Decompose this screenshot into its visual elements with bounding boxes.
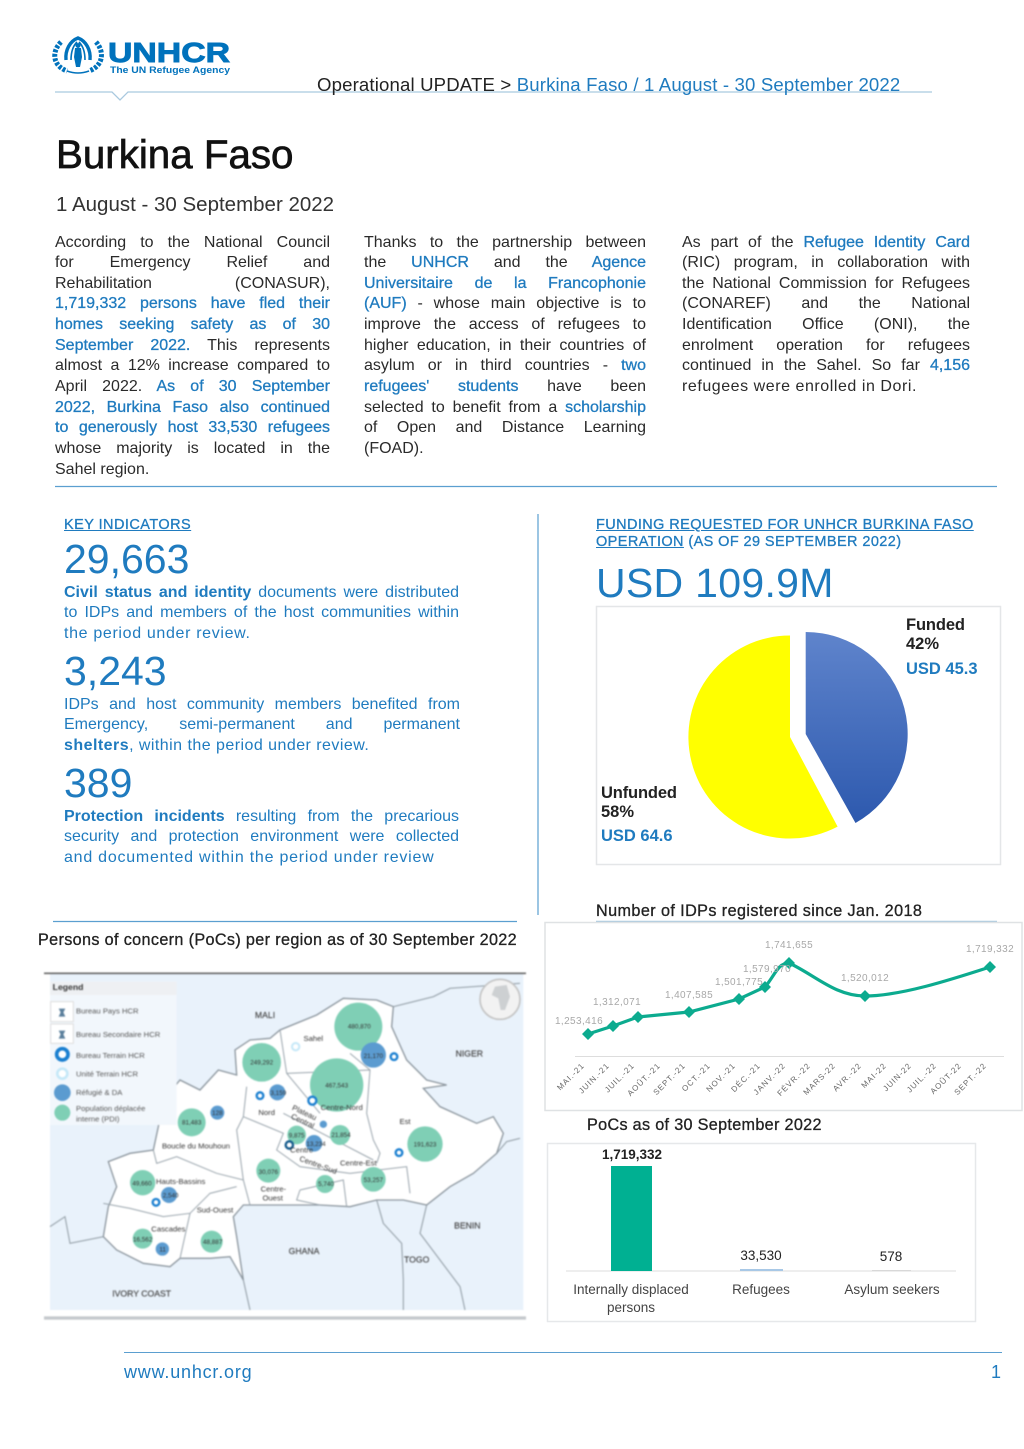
circle values: 30,076	[259, 1169, 278, 1176]
text column 2	[364, 234, 646, 457]
funding heading: OPERATION (AS OF 29 SEPTEMBER 2022)	[596, 534, 901, 550]
indicator text: shelters: shelters, within the period under review.	[64, 737, 369, 754]
key indicators panel	[64, 516, 460, 866]
bar category labels: persons	[607, 1300, 655, 1315]
indicator text: civil status: the period under review.	[64, 625, 251, 642]
label: unfunded: Unfunded	[601, 784, 677, 802]
text column 1: 1,719,332 persons have fled their	[55, 295, 330, 312]
icon: laurel wreath and sheltering hands	[55, 38, 101, 73]
month axis labels: AOÛT-22	[929, 1061, 963, 1096]
header rule with chevron	[55, 91, 932, 101]
month axis labels: JUIN-22	[881, 1061, 913, 1093]
text column 1: whose majority is located in the	[55, 440, 330, 457]
indicator text: protection incidents	[64, 808, 459, 866]
text column 1: for Emergency Relief and	[55, 254, 330, 271]
text column 1: September 2022. This represents	[55, 337, 330, 354]
circle values: 128	[212, 1110, 223, 1117]
legend: Bureau Pays HCR	[76, 1007, 139, 1016]
text column 1: to generously host 33,530 refugees	[55, 419, 330, 436]
country names: BENIN	[454, 1220, 481, 1230]
indicator text: civil status	[64, 584, 459, 642]
region names: Centre	[290, 1146, 313, 1155]
text column 2: (AUF) - whose main objective is to	[364, 295, 646, 312]
data labels: 1,520,012	[841, 973, 889, 984]
legend: Population déplacée	[76, 1104, 145, 1113]
bar category labels: Internally displaced	[573, 1282, 689, 1297]
indicator text: protection incidents: Protection incidents resulting from the precarious	[64, 808, 459, 824]
label: unfunded: USD 64.6	[601, 827, 673, 845]
legend: Réfugié & DA	[76, 1088, 123, 1097]
bar chart heading: PoCs as of 30 September 2022	[587, 1116, 822, 1134]
refugee circles	[156, 1042, 386, 1256]
text column 3: continued in the Sahel. So far 4,156	[682, 357, 970, 374]
bar category labels	[573, 1282, 940, 1315]
circle values: 2,540	[163, 1192, 179, 1199]
region names: Centre-Sud	[298, 1154, 338, 1176]
text column 3: refugees were enrolled in Dori.	[682, 378, 917, 395]
legend: Bureau Secondaire HCR	[76, 1030, 161, 1039]
pie slice: funded	[806, 632, 908, 823]
data line	[588, 963, 990, 1034]
text column 3: enrolment operation for refugees	[682, 337, 970, 354]
indicator text: shelters: Emergency, semi-permanent and permanent	[64, 716, 460, 733]
bar: refugees	[740, 1269, 783, 1271]
title: Burkina Faso	[56, 132, 293, 177]
circle values	[132, 1024, 437, 1254]
region names: Centre-	[261, 1185, 287, 1194]
text column 2: (FOAD).	[364, 440, 424, 457]
text column 2: asylum or in third countries - two	[364, 357, 646, 374]
circle values: 16,562	[133, 1236, 153, 1243]
bar values: 578	[880, 1249, 902, 1264]
circle values: 13,234	[306, 1141, 326, 1148]
IDP circles	[130, 1003, 443, 1253]
map: persons of concern by region	[43, 972, 527, 1320]
region names	[151, 1034, 411, 1234]
funding heading	[596, 517, 974, 550]
label: funded: 42%	[906, 635, 939, 653]
text column 3	[682, 234, 970, 395]
field office markers	[153, 1053, 402, 1206]
label: funded: Funded	[906, 616, 965, 634]
data labels: 1,579,970	[743, 964, 791, 975]
data labels: 1,501,775	[715, 977, 763, 988]
region names: Sahel	[304, 1034, 323, 1043]
text column 3: Identification Office (ONI), the	[682, 316, 970, 333]
text column 3: the National Commission for Refugees	[682, 275, 970, 292]
wordmark: UNHCR	[108, 37, 230, 68]
bar category labels: Refugees	[732, 1282, 790, 1297]
month axis labels: AOÛT.-21	[626, 1061, 662, 1098]
label: funded	[906, 616, 978, 678]
bar category labels: Asylum seekers	[844, 1282, 940, 1297]
text column 1	[55, 234, 330, 478]
indicator text: protection incidents: and documented within the period under review	[64, 849, 434, 866]
month axis labels: MAI-22	[860, 1061, 888, 1090]
funding pie chart panel	[596, 606, 1002, 866]
data labels: 1,312,071	[593, 997, 641, 1008]
text column 1: Sahel region.	[55, 461, 149, 478]
globe	[480, 979, 520, 1019]
indicator: 389: 389	[64, 760, 132, 806]
text column 3: (CONAREF) and the National	[682, 295, 970, 312]
text column 3: As part of the Refugee Identity Card	[682, 234, 970, 250]
region names: Ouest	[262, 1194, 284, 1203]
month axis labels: SEPT.-21	[651, 1061, 687, 1097]
circle values: 11	[159, 1247, 166, 1254]
circle values: 81,483	[182, 1120, 202, 1127]
month axis labels: MAI.-21	[555, 1061, 586, 1092]
label: funded: USD 45.3	[906, 660, 978, 678]
region names: Plateau	[291, 1103, 318, 1122]
indicator: 3,243: 3,243	[64, 648, 167, 694]
legend: Bureau Terrain HCR	[76, 1051, 145, 1060]
text column 2: the UNHCR and the Agence	[364, 254, 646, 271]
region borders	[103, 1030, 410, 1258]
text column 3: (RIC) program, in collaboration with	[682, 254, 970, 271]
bar: asylum seekers	[872, 1270, 911, 1271]
legend: Unité Terrain HCR	[76, 1070, 138, 1079]
data labels	[555, 940, 1014, 1027]
region names: Cascades	[151, 1225, 186, 1234]
text column 1: April 2022. As of 30 September	[55, 378, 330, 395]
indicator text: shelters: IDPs and host community members benefited from	[64, 696, 460, 712]
text column 1: homes seeking safety as of 30	[55, 316, 330, 333]
indicator text: protection incidents: security and protection environment were collected	[64, 828, 459, 845]
circle values: 49,660	[132, 1181, 152, 1188]
month axis labels: JUIL.-21	[603, 1061, 636, 1094]
bar values: 33,530	[740, 1248, 782, 1263]
footer url: www.unhcr.org	[124, 1362, 252, 1382]
country names: IVORY COAST	[112, 1289, 172, 1299]
Burkina Faso outline	[103, 998, 503, 1280]
data labels: 1,741,655	[765, 940, 813, 951]
circle values: 249,292	[250, 1059, 274, 1066]
data labels: 1,253,416	[555, 1016, 603, 1027]
country names: TOGO	[404, 1255, 430, 1265]
bar: internally displaced persons	[611, 1166, 652, 1271]
month axis labels: OCT.-21	[680, 1061, 712, 1093]
label: unfunded	[601, 784, 677, 845]
circle values: 9,875	[289, 1133, 305, 1140]
indicator text: civil status: Civil status and identity documents were distributed	[64, 584, 459, 600]
region names: Central	[290, 1112, 316, 1130]
country names	[112, 1010, 483, 1299]
circle values: 48,887	[203, 1239, 223, 1246]
region names: Sud-Ouest	[197, 1206, 234, 1215]
legend	[50, 982, 177, 1125]
region names: Est	[399, 1117, 411, 1126]
indicator text: civil status: to IDPs and members of the host communities within	[64, 604, 459, 621]
legend: Legend	[53, 982, 83, 992]
page number: 1	[991, 1362, 1001, 1382]
circle values: 191,623	[414, 1142, 437, 1149]
text column 2: Universitaire de la Francophonie	[364, 275, 646, 292]
month axis labels: NOV.-21	[705, 1061, 737, 1094]
country names: MALI	[255, 1010, 275, 1020]
funding total: USD 109.9M	[596, 560, 834, 606]
month axis labels	[555, 1061, 988, 1098]
text column 2: improve the access of refugees to	[364, 316, 646, 333]
indicator: 29,663: 29,663	[64, 536, 189, 582]
header breadcrumb: Operational UPDATE > Burkina Faso / 1 August - 30 September 2022	[317, 74, 900, 95]
pie slice: unfunded	[688, 635, 838, 838]
data markers	[582, 957, 996, 1040]
map heading: Persons of concern (PoCs) per region as of 30 September 2022	[38, 931, 517, 949]
month axis labels: AVR.-22	[831, 1061, 863, 1093]
country names: NIGER	[456, 1048, 483, 1058]
region names: Hauts-Bassins	[156, 1177, 206, 1186]
circle values: 3,159	[270, 1090, 287, 1097]
text column 2: higher education, in their countries of	[364, 337, 646, 354]
region names: Centre-Est	[340, 1158, 378, 1167]
circle values: 21,854	[331, 1132, 351, 1139]
month axis labels: DÉC.-21	[729, 1061, 762, 1094]
circle values: 480,870	[348, 1024, 371, 1031]
text column 2: selected to benefit from a scholarship	[364, 399, 646, 416]
text column 1: Rehabilitation (CONASUR),	[55, 275, 330, 292]
text column 1: almost a 12% increase compared to	[55, 357, 330, 374]
month axis labels: JUIL.-22	[905, 1061, 938, 1094]
text column 2: refugees' students have been	[364, 378, 646, 395]
month axis labels: JUIN.-21	[577, 1061, 611, 1095]
legend: interne (PDI)	[76, 1114, 120, 1123]
text column 1: 2022, Burkina Faso also continued	[55, 399, 330, 416]
circle values: 5,740	[318, 1181, 334, 1188]
circle values: 53,257	[364, 1177, 383, 1184]
circle values: 467,543	[325, 1082, 349, 1089]
text column 2: of Open and Distance Learning	[364, 419, 646, 436]
month axis labels: SEPT.-22	[952, 1061, 988, 1097]
month axis labels: MARS-22	[802, 1061, 837, 1097]
footer	[124, 1352, 1002, 1387]
tagline: The UN Refugee Agency	[110, 65, 230, 75]
region names: Centre-Nord	[321, 1103, 363, 1112]
circle values: 21,170	[364, 1053, 383, 1060]
text column 1: According to the National Council	[55, 234, 330, 250]
data labels: 1,407,585	[665, 990, 713, 1001]
neighbouring borders	[50, 983, 520, 1310]
key indicators heading: KEY INDICATORS	[64, 516, 191, 532]
bar values	[602, 1147, 902, 1264]
indicator text: shelters	[64, 696, 460, 754]
bar values: 1,719,332	[602, 1147, 662, 1162]
region names: Nord	[258, 1108, 275, 1117]
funding heading: FUNDING REQUESTED FOR UNHCR BURKINA FASO	[596, 517, 974, 533]
line chart heading: Number of IDPs registered since Jan. 2018	[596, 902, 922, 920]
label: unfunded: 58%	[601, 803, 634, 821]
subtitle date: 1 August - 30 September 2022	[56, 193, 334, 216]
data labels: 1,719,332	[966, 944, 1014, 955]
logo: UNHCR	[52, 36, 230, 75]
region names: Boucle du Mouhoun	[162, 1142, 230, 1151]
month axis labels: JANV.-22	[752, 1061, 787, 1097]
country names: GHANA	[289, 1246, 320, 1256]
month axis labels: FÉVR.-22	[776, 1061, 812, 1098]
text column 2: Thanks to the partnership between	[364, 234, 646, 250]
